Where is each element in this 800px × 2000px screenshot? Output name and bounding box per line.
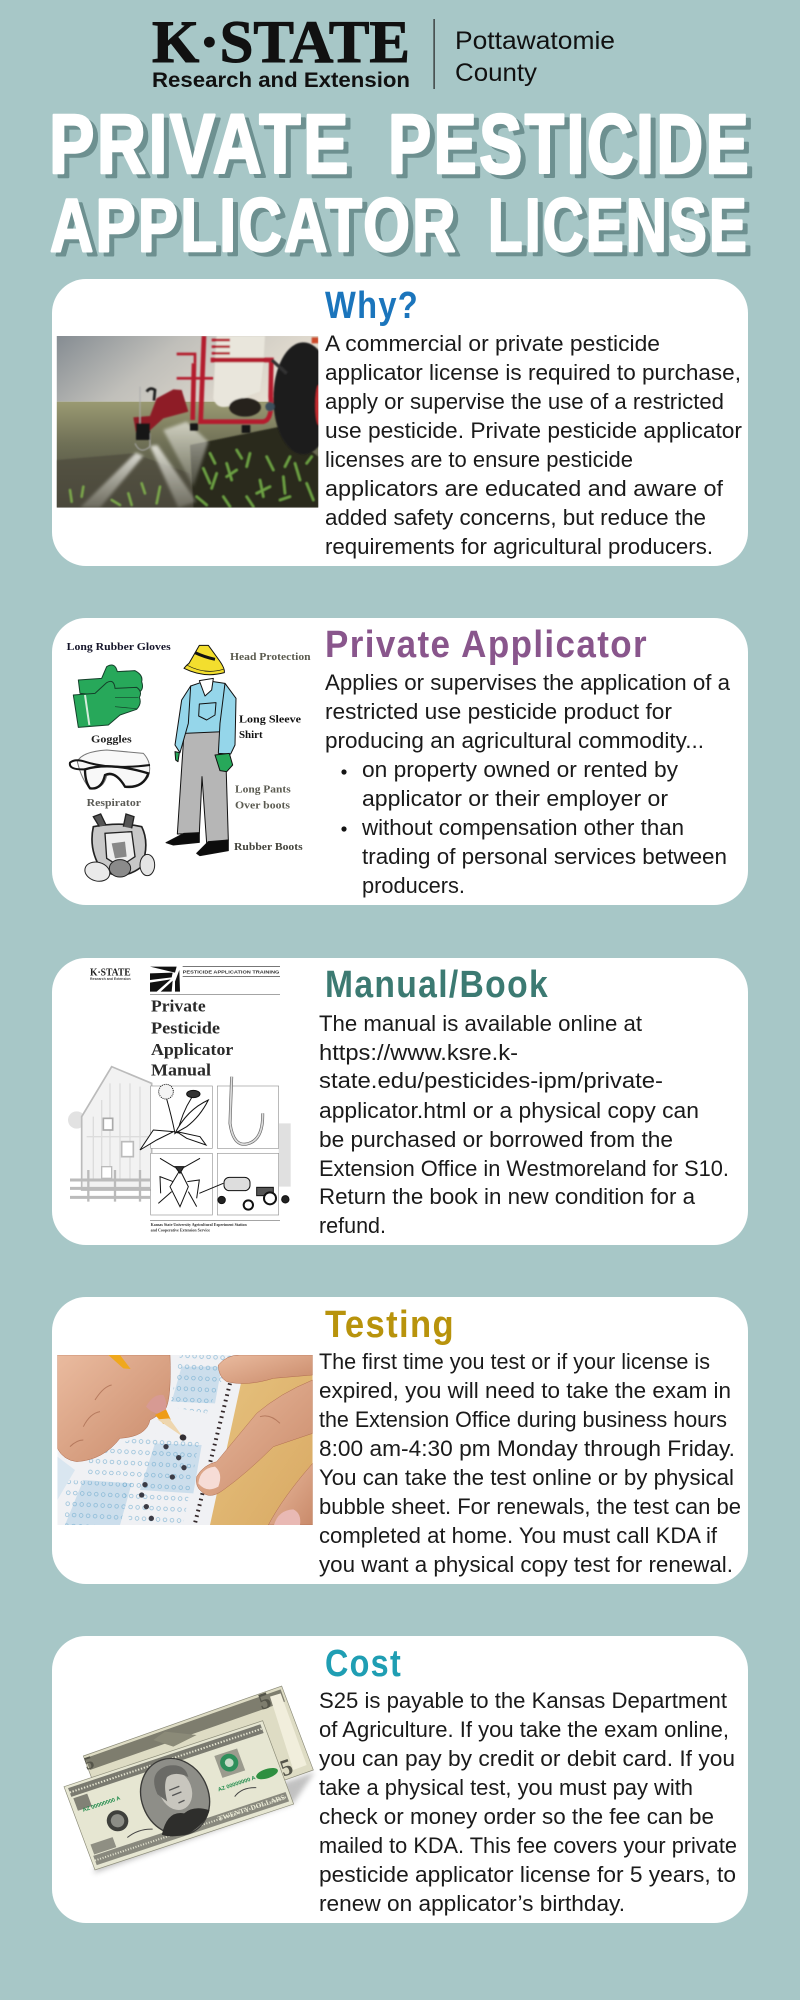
photo: dollar bills: 5 bbox=[277, 1754, 296, 1782]
text block: testing bbox=[319, 1349, 741, 1577]
panel: private applicator bbox=[52, 618, 748, 905]
text block: testing: You can take the test online or by physical bbox=[319, 1465, 734, 1490]
text block: private applicator: without compensation other than bbox=[361, 815, 684, 840]
text block: cost: mailed to KDA. This fee covers your private bbox=[319, 1833, 737, 1858]
text block: cost: pesticide applicator license for 5 years, to bbox=[319, 1862, 736, 1887]
text block: private applicator: on property owned or rented by bbox=[362, 757, 678, 782]
text block: private applicator: Applies or supervises the application of a bbox=[325, 670, 731, 695]
illustration: manual cover bbox=[68, 966, 291, 1233]
illustration: manual cover: Private bbox=[151, 997, 206, 1016]
illustration: manual cover: and Cooperative Extension Service bbox=[151, 1229, 210, 1233]
photo: filling in bubble sheet bbox=[57, 1355, 313, 1525]
text block: manual/book: be purchased or borrowed from the bbox=[319, 1127, 673, 1152]
twenty dollar bill: TWENTY DOLLARS bbox=[217, 1793, 286, 1823]
text block: private applicator: restricted use pesticide product for bbox=[325, 699, 672, 724]
text block: manual/book bbox=[319, 1011, 729, 1238]
hands bbox=[57, 1355, 313, 1525]
heading: Why?: Why? bbox=[325, 285, 419, 327]
icon: gloves bbox=[73, 665, 143, 727]
illustration: protective equipment bbox=[67, 642, 311, 884]
illustration: manual cover: Applicator bbox=[151, 1040, 234, 1059]
text block: why: licenses are to ensure pesticide bbox=[325, 447, 633, 472]
panel: cost bbox=[52, 1636, 748, 1923]
photo: dollar bills: 5 bbox=[81, 1752, 97, 1774]
text block: why: A commercial or private pesticide bbox=[325, 331, 660, 356]
illustration: protective equipment: Goggles bbox=[91, 734, 132, 745]
text block: why: use pesticide. Private pesticide applicator bbox=[325, 418, 742, 443]
icon: dandelion bbox=[140, 1084, 208, 1150]
logo: K-State Research and Extension, Pottawatomie County: County bbox=[455, 59, 538, 87]
illustration: protective equipment: Rubber Boots bbox=[234, 842, 303, 853]
text block: manual/book: applicator.html or a physical copy can bbox=[319, 1098, 699, 1123]
logo: K-State Research and Extension, Pottawatomie County: K·STATE bbox=[152, 9, 410, 75]
icon: man in protective clothing bbox=[166, 645, 236, 856]
text block: why bbox=[325, 331, 742, 559]
photo: tractor spraying crops bbox=[57, 336, 333, 508]
icon: tractor sprayer bbox=[199, 1177, 289, 1210]
photo: dollar bills bbox=[64, 1686, 315, 1873]
illustration: manual cover: Manual bbox=[151, 1061, 211, 1080]
icon: respirator bbox=[83, 814, 155, 884]
text block: why: applicators are educated and aware of bbox=[325, 476, 724, 501]
text block: manual/book: Extension Office in Westmoreland for S10. bbox=[319, 1156, 729, 1181]
logo: K-State Research and Extension, Pottawatomie County: Research and Extension bbox=[152, 69, 410, 92]
twenty dollar bill bbox=[64, 1721, 294, 1870]
text block: cost: renew on applicator’s birthday. bbox=[319, 1891, 625, 1916]
illustration: manual cover: K·STATE bbox=[90, 967, 131, 978]
text block: why: applicator license is required to purchase, bbox=[325, 360, 741, 385]
text block: manual/book: Return the book in new condition for a bbox=[319, 1184, 696, 1209]
text block: testing: the Extension Office during business hours bbox=[319, 1407, 727, 1432]
text block: manual/book: state.edu/pesticides-ipm/private- bbox=[319, 1068, 663, 1093]
twenty dollar bill: AZ 00000000 A bbox=[82, 1796, 121, 1814]
illustration: protective equipment: Respirator bbox=[87, 798, 141, 809]
text block: why: apply or supervise the use of a restricted bbox=[325, 389, 724, 414]
illustration: manual cover: Research and Extension bbox=[90, 977, 131, 981]
heading: Manual/Book: Manual/Book bbox=[325, 964, 549, 1006]
panel: manual/book bbox=[52, 958, 748, 1245]
text block: cost: take a physical test, you must pay with bbox=[319, 1775, 693, 1800]
text block: cost: S25 is payable to the Kansas Department bbox=[319, 1688, 727, 1713]
text block: manual/book: https://www.ksre.k- bbox=[319, 1040, 518, 1065]
illustration: manual cover: Pesticide bbox=[151, 1018, 220, 1037]
panel: testing bbox=[52, 1297, 748, 1584]
illustration: protective equipment: Long Pants bbox=[235, 785, 291, 796]
text block: private applicator: applicator or their employer or bbox=[362, 786, 668, 811]
illustration: protective equipment: Over boots bbox=[235, 800, 290, 811]
title: PRIVATE bbox=[49, 97, 351, 191]
illustration: protective equipment: Long Rubber Gloves bbox=[67, 642, 171, 653]
text block: testing: bubble sheet. For renewals, the test can be bbox=[319, 1494, 741, 1519]
icon: hook worm bbox=[230, 1077, 263, 1144]
pencil bbox=[108, 1355, 131, 1369]
text block: cost bbox=[319, 1688, 737, 1916]
text block: cost: check or money order so the fee can be bbox=[319, 1804, 714, 1829]
text block: testing: 8:00 am-4:30 pm Monday through Friday. bbox=[319, 1436, 735, 1461]
icon: goggles bbox=[70, 750, 150, 789]
panel: why bbox=[52, 279, 748, 566]
text block: why: requirements for agricultural producers. bbox=[325, 534, 713, 559]
title: APPLICATOR bbox=[50, 183, 458, 267]
twenty dollar bill: AZ 00000000 A bbox=[217, 1775, 257, 1793]
text block: testing: expired, you will need to take the exam in bbox=[319, 1378, 731, 1403]
icon: insect bbox=[158, 1158, 200, 1207]
text block: manual/book: The manual is available online at bbox=[319, 1011, 642, 1036]
text block: private applicator: producing an agricultural commodity... bbox=[325, 728, 704, 753]
illustration: protective equipment: Head Protection bbox=[230, 652, 311, 663]
photo: dollar bills: 5 bbox=[255, 1687, 275, 1716]
heading: Cost: Cost bbox=[325, 1643, 402, 1685]
title bbox=[49, 97, 751, 267]
text block: manual/book: refund. bbox=[319, 1213, 386, 1238]
text block: private applicator bbox=[325, 670, 731, 898]
text block: testing: completed at home. You must call KDA if bbox=[319, 1523, 718, 1548]
barn drawing bbox=[68, 1067, 291, 1202]
icon: sun rays logo bbox=[150, 967, 180, 992]
logo: K-State Research and Extension, Pottawatomie County: Pottawatomie bbox=[455, 27, 615, 55]
heading: Testing: Testing bbox=[325, 1304, 455, 1346]
illustration: protective equipment: Long Sleeve bbox=[239, 714, 301, 725]
text block: testing: you want a physical copy test for renewal. bbox=[319, 1552, 733, 1577]
logo: K-State Research and Extension, Pottawatomie County bbox=[152, 9, 615, 92]
text block: cost: you can pay by credit or debit card. If you bbox=[319, 1746, 735, 1771]
heading: Private Applicator: Private Applicator bbox=[325, 624, 648, 666]
illustration: manual cover: Kansas State University Agricultural Experiment Station bbox=[151, 1223, 247, 1227]
text block: private applicator: producers. bbox=[362, 873, 465, 898]
text block: cost: of Agriculture. If you take the exam online, bbox=[319, 1717, 729, 1742]
text block: private applicator: trading of personal services between bbox=[362, 844, 727, 869]
illustration: protective equipment: Shirt bbox=[239, 730, 263, 741]
text block: why: added safety concerns, but reduce the bbox=[325, 505, 706, 530]
illustration: manual cover: PESTICIDE APPLICATION TRAINING bbox=[183, 969, 279, 975]
text block: testing: The first time you test or if your license is bbox=[319, 1349, 710, 1374]
five dollar bill bbox=[83, 1686, 313, 1840]
